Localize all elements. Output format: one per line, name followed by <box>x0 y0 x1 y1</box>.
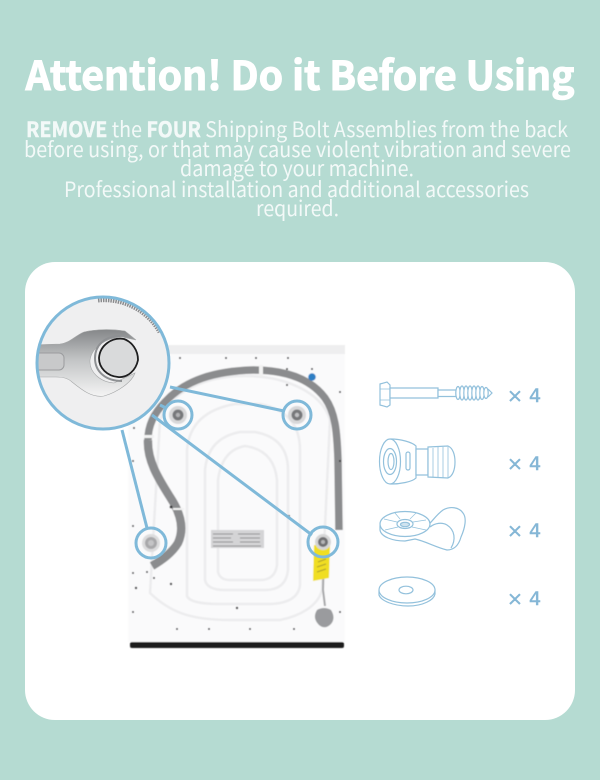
top edge shade <box>128 345 345 354</box>
title: Attention! Do it Before Using <box>25 44 575 102</box>
warning text block: required. <box>256 193 339 223</box>
yellow warning tag <box>313 545 330 581</box>
magnified wrench view <box>30 297 169 429</box>
icon: flat washer <box>379 577 435 606</box>
warning text block: REMOVE the FOUR Shipping Bolt Assemblies from the back <box>26 114 568 144</box>
icon: bolt <box>380 382 492 407</box>
power cord <box>323 550 325 606</box>
rating label <box>211 530 264 548</box>
warning text block: Professional installation and additional accessories <box>64 174 529 204</box>
label: sleeve count: × 4 <box>507 453 541 475</box>
infographic canvas <box>24 56 575 720</box>
warning text block <box>24 114 571 223</box>
label: washer count: × 4 <box>507 588 541 610</box>
bolt head <box>99 339 138 377</box>
magnifier ring <box>37 297 169 429</box>
hose clips <box>144 365 263 510</box>
screw holes <box>132 357 341 630</box>
bolt highlight circles <box>136 401 338 558</box>
label: clip count: × 4 <box>507 520 541 542</box>
wrench body <box>30 330 136 396</box>
blue knob <box>308 373 316 381</box>
wrench jaw rim <box>95 336 122 381</box>
magnifier background <box>37 297 169 429</box>
label: bolt count: × 4 <box>507 385 541 407</box>
machine feet <box>130 642 344 648</box>
wrench and bolt <box>30 300 160 396</box>
embossed rear panel <box>150 376 330 620</box>
callout lines <box>122 387 312 535</box>
parts list <box>379 382 541 610</box>
wrench handle groove <box>38 352 64 370</box>
warning text block: before using, or that may cause violent vibration and severe <box>24 134 571 164</box>
shipping bolts on machine <box>142 406 331 552</box>
icon: clip retainer <box>380 508 465 550</box>
panel: white card <box>25 262 575 720</box>
warning text block: damage to your machine. <box>180 153 414 183</box>
power plug <box>315 608 334 627</box>
icon: threaded sleeve <box>380 439 455 484</box>
machine body <box>128 345 345 642</box>
washing machine back view <box>128 345 345 648</box>
hatched machine edge <box>98 300 160 332</box>
drain hose <box>148 370 339 566</box>
